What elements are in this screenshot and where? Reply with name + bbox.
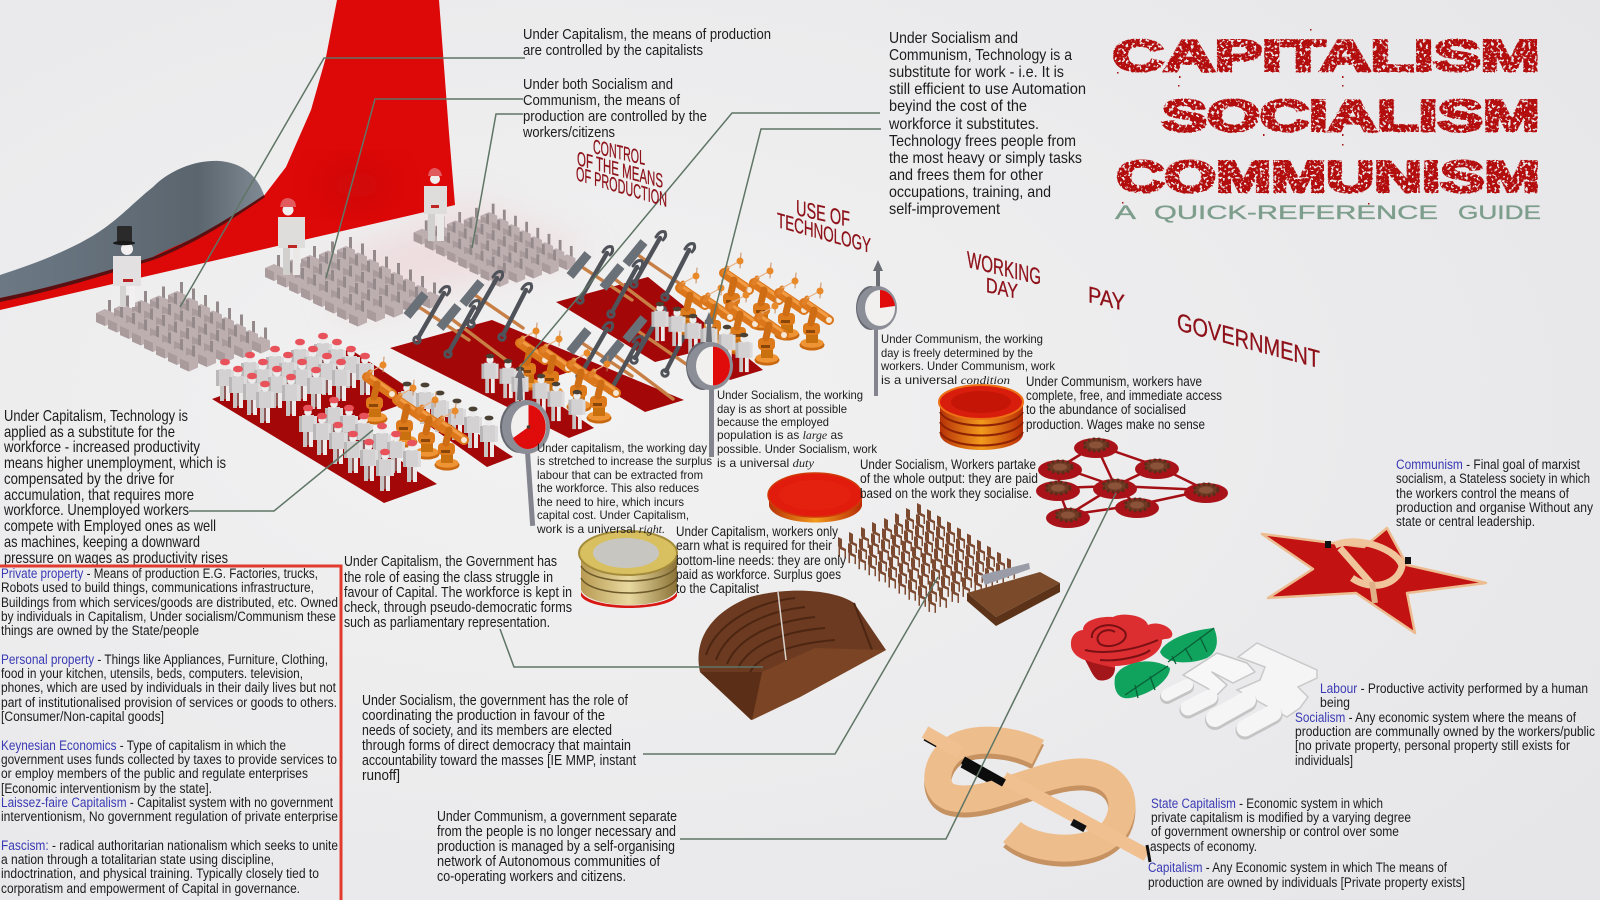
definition: socialism: [1295, 710, 1595, 768]
text: socialism government: [362, 693, 636, 784]
robots and workers: communism: [651, 253, 832, 372]
text: socialism government: needs of society, and its members are elected: [362, 723, 612, 739]
definition: capitalism: production are owned by individuals [Private property exists]: [1148, 875, 1465, 890]
text: communism working day: workers. Under Communism, work: [880, 359, 1056, 373]
subtitle: GUIDE: [1458, 202, 1541, 224]
text: capitalism pay: [676, 524, 846, 596]
text: communism government: production is managed by a self-organising: [437, 839, 675, 855]
heading: control of the means of production: [576, 136, 667, 212]
text: communism government: from the people is no longer necessary and: [437, 824, 676, 840]
text: capitalism working day: labour that can be extracted from: [537, 468, 703, 482]
definition: communism: Communism - Final goal of marxist: [1396, 457, 1580, 472]
glossary: private property: [1, 566, 338, 638]
parliament: capitalism: [698, 591, 886, 720]
glossary: keynesian economics: or employ members of the public and regulate enterprises: [1, 766, 308, 781]
carpet: socialism technology: [390, 320, 684, 438]
text: socialism communism technology: still efficient to use Automation: [889, 81, 1086, 98]
title: CAPITALISM: [1112, 32, 1540, 80]
icon: dollar sign: [925, 732, 1150, 862]
clock: communism: [856, 260, 897, 396]
text: socialism communism technology: beyind the cost of the: [889, 98, 1027, 115]
glossary: private property: things are owned by the State/people: [1, 623, 199, 638]
curve: grey capitalist wave: [0, 161, 264, 298]
connector lines: [180, 58, 1116, 839]
network: communism: [1036, 438, 1228, 528]
text: capitalism government: [344, 554, 572, 631]
glossary: fascism: [1, 838, 338, 896]
text: socialism communism means of production: workers/citizens: [522, 125, 615, 141]
text: communism working day: is a universal condition: [881, 373, 1010, 387]
text: capitalism working day: is stretched to increase the surplus: [537, 454, 712, 468]
definition: state capitalism: aspects of economy.: [1150, 839, 1257, 854]
glossary: private property: Robots used to build things, communications infrastructure,: [1, 580, 314, 595]
text: socialism working day: Under Socialism, the working: [717, 388, 863, 402]
coin stack: capitalism euro: [579, 531, 677, 608]
glossary: keynesian economics: Keynesian Economics - Type of capitalism in which the: [1, 738, 286, 753]
subtitle: QUICK-REFERENCE: [1154, 202, 1438, 224]
definition: communism: the workers control the means of: [1396, 486, 1569, 501]
curve: red wave: [0, 0, 600, 320]
text: socialism working day: is a universal duty: [717, 456, 815, 470]
heading: control of the means of production: OF PRODUCTION: [576, 163, 667, 212]
text: socialism working day: possible. Under Socialism, work: [717, 442, 878, 456]
text: communism working day: [880, 332, 1056, 387]
text: capitalism technology: Under Capitalism, Technology is: [4, 408, 188, 425]
text: capitalism technology: [3, 408, 228, 567]
glossary: keynesian economics: [Economic interventionism by the state].: [1, 781, 212, 796]
text: capitalism government: the role of easing the class struggle in: [344, 570, 553, 586]
text: socialism pay: based on the work they socialise.: [860, 486, 1032, 501]
carpet: capitalism technology: [212, 349, 513, 503]
text: communism government: co-operating workers and citizens.: [437, 869, 626, 885]
glossary: personal property: [Consumer/Non-capital goods]: [1, 709, 164, 724]
text: capitalism technology: applied as a substitute for the: [4, 424, 175, 441]
definition: socialism: [no private property, personal property still exists for: [1295, 738, 1570, 753]
glossary: fascism: Fascism: - radical authoritarian nationalism which seeks to unite: [1, 838, 338, 853]
text: communism government: [437, 809, 677, 885]
figure: worker communism: [424, 168, 447, 241]
text: capitalism pay: Under Capitalism, workers only: [676, 524, 838, 539]
definition: state capitalism: State Capitalism - Economic system in which: [1151, 796, 1383, 811]
panel: glossary red box: [0, 566, 341, 900]
glossary: personal property: part of institutionalised provision of services or goods to others.: [1, 695, 337, 710]
tools: lower set: [570, 308, 695, 399]
title: SOCIALISM: [1162, 92, 1540, 140]
text: socialism communism technology: Technology frees people from: [889, 133, 1076, 150]
glossary: fascism: a nation through a totalitarian state using discipline,: [1, 852, 274, 867]
glossary: personal property: Personal property - Things like Appliances, Furniture, Clothing,: [1, 652, 328, 667]
text: capitalism pay: bottom-line needs: they are only: [676, 553, 846, 568]
text: capitalism technology: workforce - increased productivity: [3, 439, 200, 456]
text: capitalism working day: capital cost. Under Capitalism,: [537, 508, 689, 522]
workers capitalism: unemployed: [398, 382, 498, 457]
subtitle: A: [1115, 202, 1136, 224]
definition: communism: [1396, 457, 1593, 529]
text: capitalism government: such as parliamentary representation.: [344, 615, 550, 631]
text: socialism communism technology: and frees them for other: [889, 167, 1044, 184]
text: capitalism pay: paid as workforce. Surplus goes: [676, 567, 841, 582]
text: socialism government: Under Socialism, the government has the role of: [362, 693, 629, 709]
coin stack: communism: [939, 385, 1023, 450]
text: capitalism government: check, through pseudo-democratic forms: [344, 600, 572, 616]
text: socialism communism means of production: Communism, the means of: [523, 93, 681, 109]
glossary: private property: Buildings from which services/goods are distributed, etc. Owned: [1, 595, 338, 610]
text: communism working day: day is freely determined by the: [881, 346, 1033, 360]
text: capitalism government: favour of Capital. The workforce is kept in: [344, 585, 572, 601]
text: communism working day: Under Communism, the working: [881, 332, 1043, 346]
heading: use of technology: USE OF: [796, 195, 850, 232]
text: capitalism working day: Under capitalism, the working day: [537, 441, 707, 455]
glossary: private property: by individuals in Capitalism, Under socialism/Communism these: [1, 609, 336, 624]
glossary: keynesian economics: government uses funds collected by taxes to provide services to: [1, 752, 337, 767]
glossary: personal property: [1, 652, 337, 724]
text: communism government: network of Autonomous communities of: [437, 854, 661, 870]
text: capitalism working day: the need to hire, which incurs: [537, 495, 684, 509]
heading: working day: DAY: [986, 274, 1018, 304]
tools: left set: [407, 272, 532, 363]
text: socialism pay: Under Socialism, Workers partake: [860, 457, 1036, 472]
text: socialism government: coordinating the production in favour of the: [362, 708, 605, 724]
clock: capitalism: [500, 367, 550, 526]
title: [1112, 29, 1540, 204]
text: socialism government: through forms of direct democracy that maintain: [362, 738, 631, 754]
glossary: fascism: indoctrination, and physical training. Typically closely tied to: [1, 866, 319, 881]
text: capitalism technology: as machines, keeping a downward: [4, 534, 200, 551]
text: socialism working day: population is as large as: [717, 428, 843, 442]
definition: communism: state or central leadership.: [1396, 514, 1535, 529]
title: COMMUNISM: [1116, 152, 1540, 202]
heading: control of the means of production: OF THE MEANS: [577, 148, 663, 193]
text: capitalism government: Under Capitalism, the Government has: [344, 554, 557, 570]
definition: labour: [1320, 681, 1588, 710]
text: capitalism pay: to the Capitalist: [676, 581, 759, 596]
text: capitalism means of production: are controlled by the capitalists: [523, 43, 703, 59]
workers capitalism: front block: [299, 397, 421, 491]
text: socialism communism technology: substitute for work - i.e. It is: [889, 64, 1064, 81]
coin: socialism: [768, 473, 862, 522]
glossary: laissez-faire capitalism: Laissez-faire Capitalism - Capitalist system with no government: [1, 795, 333, 810]
workers capitalism: back block: [216, 333, 374, 423]
text: capitalism technology: means higher unemployment, which is: [4, 455, 226, 472]
text: communism pay: complete, free, and immediate access: [1026, 388, 1222, 403]
subtitle: [1115, 202, 1541, 224]
definition: state capitalism: of government ownership or control over some: [1151, 824, 1399, 839]
definition: capitalism: [1148, 860, 1465, 890]
text: socialism communism technology: self-improvement: [889, 201, 1001, 218]
definition: labour: being: [1320, 695, 1350, 710]
definition: state capitalism: private capitalism is modified by a varying degree: [1151, 810, 1411, 825]
glossary: personal property: food in your kitchen, utensils, beds, computers. television,: [1, 666, 303, 681]
text: socialism government: accountability toward the masses [IE MMP, instant: [362, 753, 636, 769]
figure: worker socialism: [278, 198, 305, 275]
text: communism government: Under Communism, a government separate: [437, 809, 677, 825]
text: communism pay: Under Communism, workers have: [1026, 374, 1202, 389]
field: factories communism: [414, 204, 575, 287]
heading: working day: [967, 246, 1041, 304]
chairs: socialism: [838, 503, 1015, 613]
field: factories socialism: [265, 237, 439, 326]
glossary: laissez-faire capitalism: interventionism, No government regulation of private enterprise: [1, 809, 338, 824]
text: socialism communism means of production: Under both Socialism and: [523, 77, 673, 93]
carpet: communism technology: [556, 277, 763, 380]
icon: leaves: [1115, 628, 1217, 698]
text: capitalism pay: earn what is required for their: [676, 538, 832, 553]
icon: white fist: [1167, 643, 1317, 730]
figure: capitalist with top hat: [113, 226, 141, 307]
glossary: keynesian economics: [1, 738, 337, 796]
text: socialism communism technology: occupations, training, and: [889, 184, 1051, 201]
text: socialism working day: day is as short at possible: [717, 402, 847, 416]
text: socialism pay: of the whole output: they are paid: [860, 471, 1038, 486]
tools: upper set: [570, 232, 695, 323]
text: capitalism technology: accumulation, that requires more: [4, 487, 194, 504]
icon: red star with hammer and sickle: [1262, 528, 1486, 633]
heading: working day: WORKING: [967, 246, 1041, 290]
robots and workers: socialism: [481, 323, 619, 429]
text: socialism communism technology: workforce it substitutes.: [888, 116, 1039, 133]
text: capitalism working day: work is a universal right.: [536, 522, 665, 536]
text: socialism communism technology: [888, 30, 1086, 218]
text: capitalism means of production: Under Capitalism, the means of production: [523, 27, 771, 43]
heading: control of the means of production: CONTROL: [593, 136, 645, 170]
heading: pay: PAY: [1088, 281, 1125, 316]
text: socialism pay: [860, 457, 1038, 501]
text: communism pay: [1026, 374, 1222, 432]
heading: use of technology: TECHNOLOGY: [777, 208, 871, 258]
glossary: private property: Private property - Means of production E.G. Factories, trucks,: [1, 566, 318, 581]
text: socialism working day: [717, 388, 878, 470]
field: factories capitalism: [96, 282, 270, 372]
text: socialism government: runoff]: [362, 768, 400, 784]
definition: socialism: individuals]: [1295, 753, 1353, 768]
clock: socialism: [686, 312, 733, 457]
text: socialism working day: because the employed: [717, 415, 829, 429]
text: capitalism working day: [536, 441, 712, 536]
podium: socialism: [967, 563, 1060, 626]
heading: use of technology: [777, 195, 871, 258]
glossary: personal property: phones, which are used by individuals in their daily lives but not: [1, 680, 336, 695]
text: capitalism means of production: [523, 27, 771, 59]
robots capitalism: [362, 357, 467, 470]
text: capitalism technology: compete with Employed ones as well: [4, 518, 216, 535]
text: capitalism technology: pressure on wages as productivity rises: [4, 550, 228, 567]
text: socialism communism technology: Under Socialism and: [889, 30, 1018, 47]
text: communism pay: to the abundance of socialised: [1026, 402, 1186, 417]
glossary: laissez-faire capitalism: [1, 795, 338, 824]
text: capitalism technology: compensated by the drive for: [4, 471, 175, 488]
text: socialism communism means of production: [522, 77, 707, 141]
text: socialism communism technology: Communism, Technology is a: [889, 47, 1072, 64]
text: communism pay: production. Wages make no sense: [1026, 417, 1205, 432]
text: capitalism technology: workforce. Unemployed workers: [3, 502, 189, 519]
glossary: fascism: corporatism and empowerment of Capital in governance.: [1, 881, 300, 896]
heading: government: GOVERNMENT: [1177, 308, 1320, 374]
text: socialism communism technology: the most heavy or simply tasks: [889, 150, 1082, 167]
text: socialism communism means of production: production are controlled by the: [523, 109, 707, 125]
text: capitalism working day: the workforce. This also reduces: [537, 481, 699, 495]
icon: rose: [1071, 615, 1172, 680]
definition: capitalism: Capitalism - Any Economic system in which The means of: [1148, 860, 1447, 875]
definition: state capitalism: [1150, 796, 1411, 854]
